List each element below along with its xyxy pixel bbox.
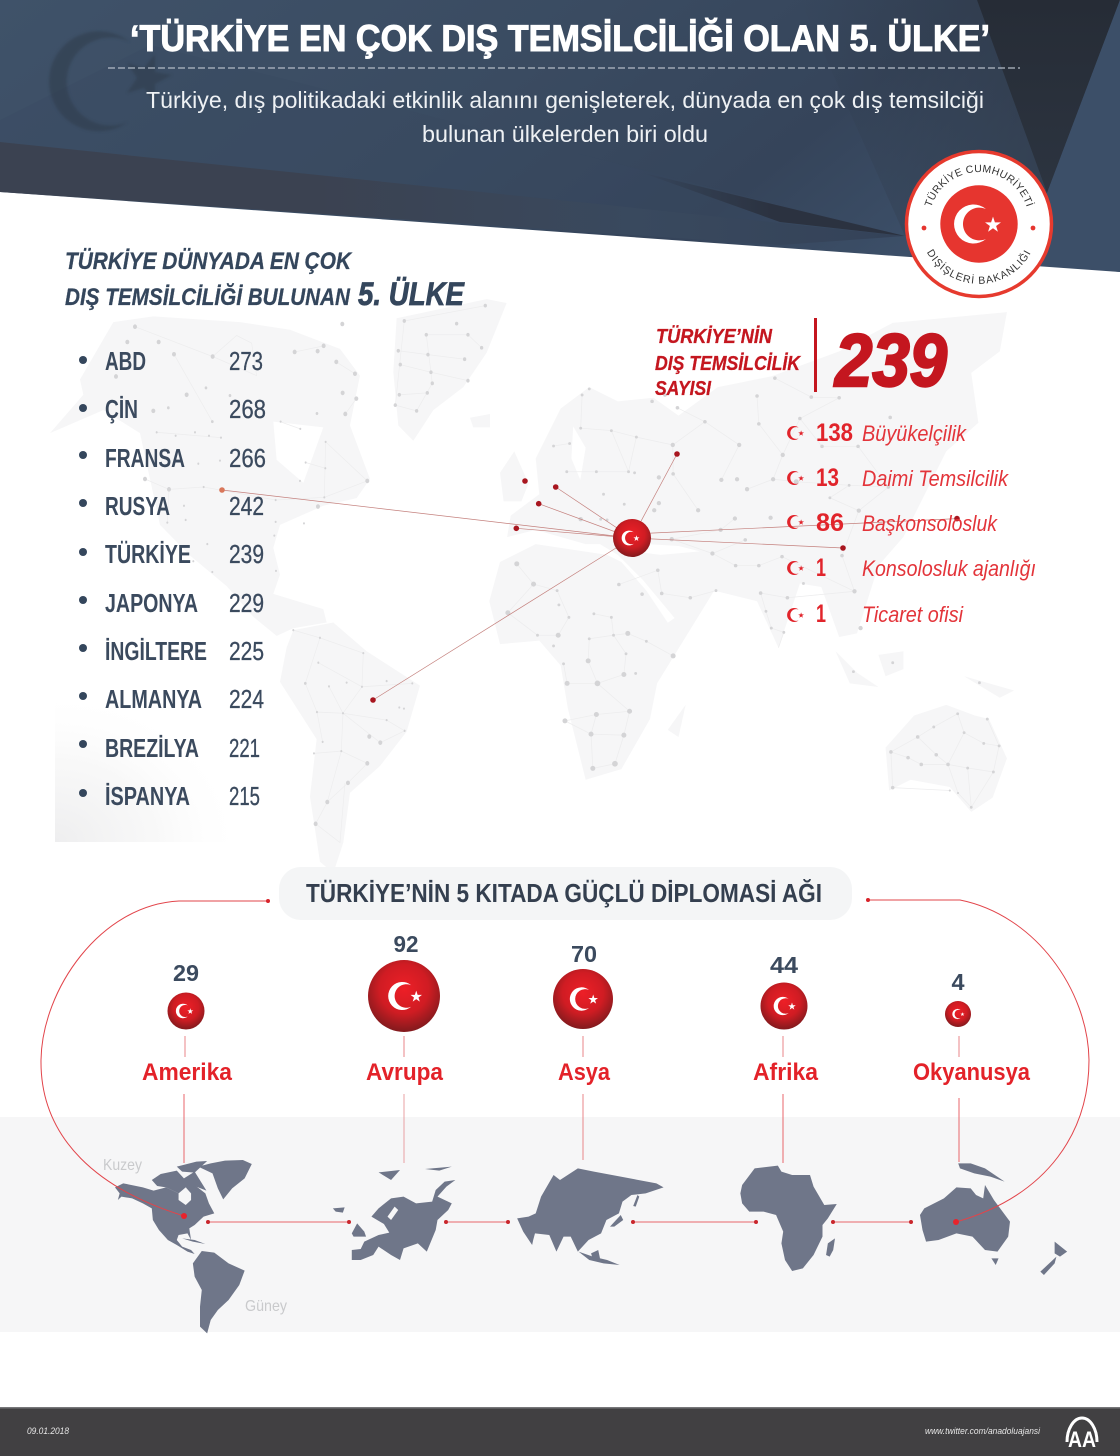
subtitle (146, 87, 984, 147)
total missions callout: 239 (833, 319, 947, 402)
subtitle: bulunan ülkelerden biri oldu (422, 121, 708, 147)
row: permanent missions: Daimi Temsilcilik (862, 466, 1009, 491)
icon: foreign ministry seal: DIŞİŞLERİ BAKANLIĞI (927, 249, 1030, 284)
total missions callout: TÜRKİYE’NİN (656, 325, 772, 348)
ranking list (79, 348, 266, 811)
map: Americas (115, 1160, 252, 1333)
mission type breakdown (787, 419, 1036, 628)
row: consulates general: Başkonsolosluk (862, 511, 998, 536)
row: embassies: Büyükelçilik (862, 421, 967, 446)
row: Türkiye: TÜRKİYE (105, 540, 191, 569)
right arc connector (866, 898, 1089, 1225)
icon: Anadolu Agency logo (1067, 1418, 1097, 1452)
icon: foreign ministry seal (904, 150, 1054, 298)
row: permanent missions (787, 464, 1009, 492)
column: Avrupa: 92 (394, 931, 418, 957)
heading: 5th country: 5. ÜLKE (358, 276, 465, 312)
footer bar (0, 1407, 1120, 1456)
column: Asya (553, 941, 613, 1160)
direction labels: Güney (245, 1298, 287, 1315)
left arc connector (41, 899, 270, 1219)
world map background (50, 299, 1014, 873)
header banner (0, 0, 1120, 272)
column: Afrika: 44 (770, 952, 798, 978)
icon: foreign ministry seal: TÜRKİYE CUMHURİYETİ (924, 164, 1036, 206)
row: Çin: ÇİN (105, 396, 138, 424)
row: consulates general (787, 509, 998, 537)
continent connectors (206, 1220, 913, 1224)
mission location dots (219, 451, 960, 703)
column: Amerika (142, 960, 233, 1163)
heading pill: diplomacy network (279, 867, 852, 920)
row: trade office: 1 (816, 600, 826, 628)
heading pill: diplomacy network: TÜRKİYE’NİN 5 KITADA GÜÇLÜ DİPLOMASİ AĞI (306, 878, 822, 908)
map: Asia (517, 1168, 664, 1265)
icon: embossed crescent and star (49, 31, 172, 131)
row: Türkiye: 239 (229, 541, 264, 569)
row: Brezilya: 221 (229, 735, 260, 763)
row: İngiltere: 225 (229, 638, 264, 666)
column: Avrupa: Avrupa (366, 1059, 444, 1086)
column: Avrupa (366, 931, 444, 1163)
row: Fransa: 266 (229, 445, 266, 473)
map: Oceania (920, 1163, 1067, 1275)
heading: 5th country (65, 248, 465, 312)
icon: Anadolu Agency logo: AA (1068, 1427, 1096, 1452)
row: trade office (787, 600, 964, 628)
total missions callout: DIŞ TEMSİLCİLİK (655, 352, 801, 375)
row: consulates general: 86 (816, 509, 844, 537)
row: permanent missions: 13 (816, 464, 839, 492)
row: ABD (79, 348, 263, 376)
map: Africa (740, 1166, 837, 1271)
continent columns (142, 931, 1031, 1163)
row: trade office: Ticaret ofisi (862, 602, 964, 627)
icon: Türkiye flag ball on map (613, 519, 651, 557)
total missions callout (655, 318, 947, 402)
row: Çin (79, 396, 266, 424)
row: ABD: 273 (229, 348, 263, 376)
column: Okyanusya: 4 (952, 969, 965, 995)
row: embassies: 138 (816, 419, 853, 447)
row: Brezilya: BREZİLYA (105, 735, 199, 763)
column: Asya: 70 (571, 941, 597, 967)
heading: 5th country: DIŞ TEMSİLCİLİĞİ BULUNAN (65, 283, 351, 311)
row: İngiltere: İNGİLTERE (105, 638, 207, 666)
row: Rusya (79, 493, 264, 521)
row: Japonya: JAPONYA (105, 590, 198, 618)
row: Almanya: 224 (229, 686, 264, 714)
map: Europe (333, 1167, 455, 1260)
row: Çin: 268 (229, 396, 266, 424)
row: İspanya (79, 783, 260, 811)
direction labels (103, 1157, 287, 1315)
total missions callout: SAYISI (655, 378, 711, 400)
column: Amerika: 29 (173, 960, 199, 986)
row: consular agency: 1 (816, 554, 826, 582)
heading: 5th country: TÜRKİYE DÜNYADA EN ÇOK (65, 248, 353, 275)
row: ABD: ABD (105, 348, 146, 376)
row: Japonya (79, 590, 264, 618)
column: Okyanusya (913, 969, 1031, 1162)
row: Japonya: 229 (229, 590, 264, 618)
row: embassies (787, 419, 967, 447)
row: Türkiye (79, 540, 264, 569)
row: consular agency (787, 554, 1036, 582)
row: Rusya: RUSYA (105, 493, 170, 521)
row: Almanya (79, 686, 264, 714)
subtitle: Türkiye, dış politikadaki etkinlik alanını genişleterek, dünyada en çok dış temsilciği (146, 87, 984, 113)
column: Asya: Asya (558, 1059, 611, 1086)
row: İspanya: 215 (229, 783, 260, 811)
row: Rusya: 242 (229, 493, 264, 521)
continent maps (115, 1160, 1067, 1333)
title: ‘TÜRKİYE EN ÇOK DIŞ TEMSİLCİLİĞİ OLAN 5. ÜLKE’ (130, 18, 990, 59)
column: Okyanusya: Okyanusya (913, 1059, 1031, 1086)
footer bar: www.twitter.com/anadoluajansi (925, 1426, 1041, 1436)
column: Afrika (753, 952, 819, 1163)
row: Fransa (79, 445, 266, 473)
row: consular agency: Konsolosluk ajanlığı (862, 556, 1036, 581)
column: Afrika: Afrika (753, 1059, 819, 1086)
connection lines from Türkiye (222, 454, 957, 700)
footer bar: 09.01.2018 (27, 1426, 69, 1436)
row: Brezilya (79, 735, 260, 763)
row: Almanya: ALMANYA (105, 686, 202, 714)
column: Amerika: Amerika (142, 1059, 233, 1086)
row: Fransa: FRANSA (105, 445, 185, 473)
row: İspanya: İSPANYA (105, 783, 190, 811)
direction labels: Kuzey (103, 1157, 142, 1174)
grey continent band (0, 1117, 1120, 1332)
